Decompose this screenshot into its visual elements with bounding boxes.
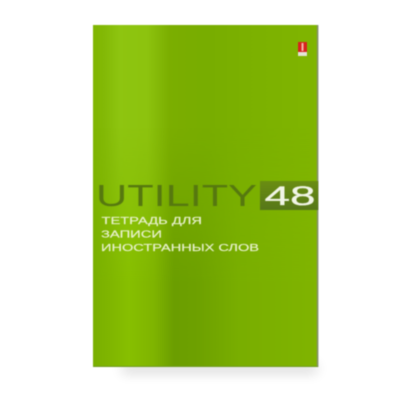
drop shadow under notebook bbox=[122, 364, 317, 373]
badge: 48: 48 bbox=[264, 181, 316, 211]
badge: 48 bbox=[260, 181, 318, 211]
text block: notebook description: ИНОСТРАННЫХ СЛОВ bbox=[101, 243, 260, 254]
title: UTILITY: UTILITY bbox=[96, 178, 257, 213]
notebook cover bbox=[93, 25, 318, 367]
text block: notebook description: ТЕТРАДЬ ДЛЯ bbox=[102, 216, 202, 227]
text block: notebook description: ЗАПИСИ bbox=[101, 230, 162, 240]
text block: notebook description bbox=[101, 216, 260, 254]
icon: brand logo bbox=[298, 42, 307, 56]
